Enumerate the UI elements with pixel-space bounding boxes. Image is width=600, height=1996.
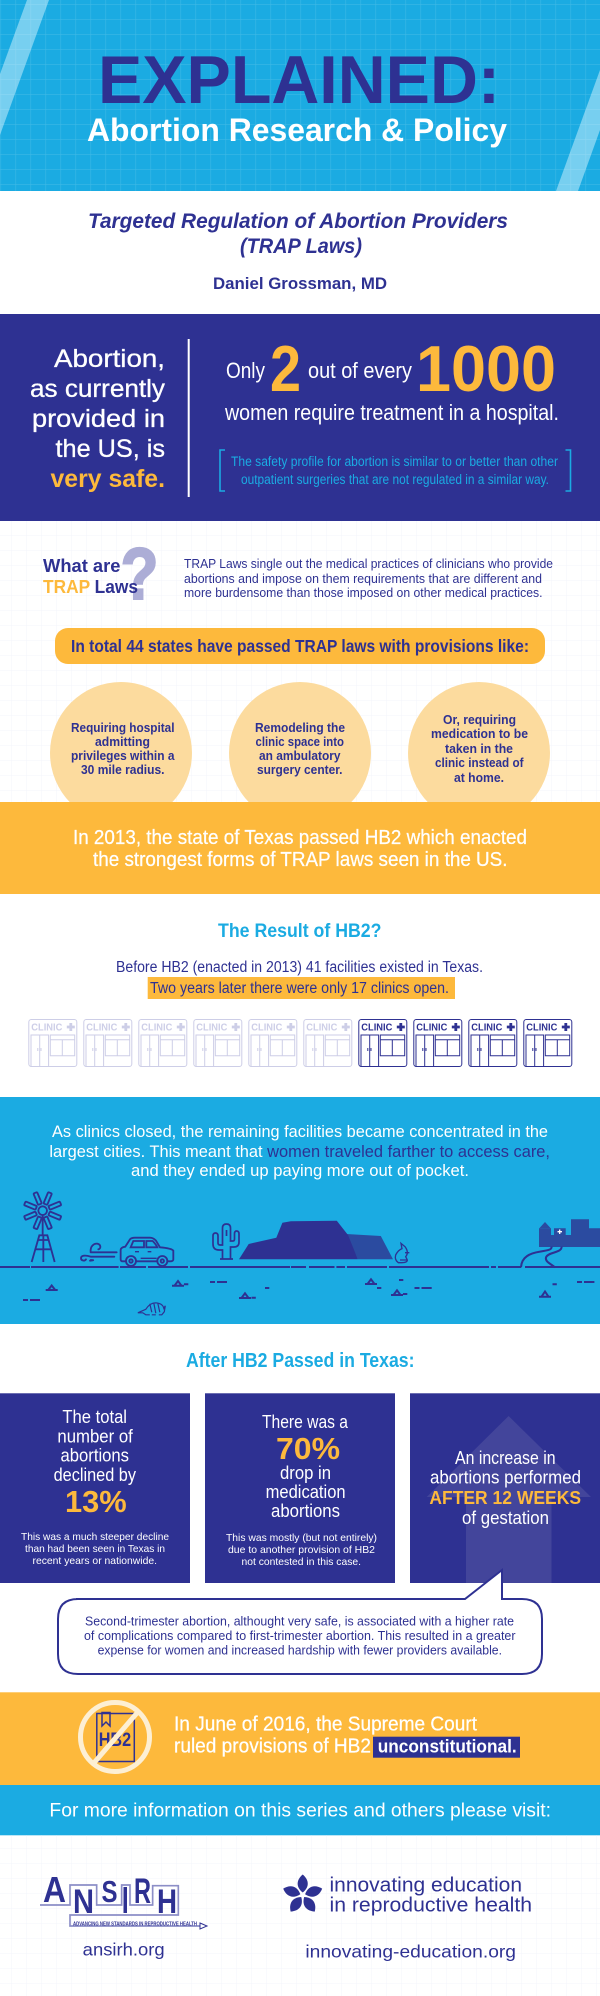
circle: remodeling: Remodeling the xyxy=(255,720,345,735)
icon: open clinic 3 xyxy=(469,1020,517,1067)
icon: open clinic 1: CLINIC xyxy=(361,1022,393,1034)
panel: 13 percent decline: The total xyxy=(62,1407,127,1427)
circle: remodeling: an ambulatory xyxy=(259,748,341,763)
banner: Texas HB2: the strongest forms of TRAP laws seen in the US. xyxy=(93,849,508,871)
logo text: innovating education: innovating education xyxy=(330,1875,522,1897)
panel: 13 percent decline: This was a much steeper decline xyxy=(21,1531,169,1543)
icon: flower logo xyxy=(282,1874,324,1915)
icon: closed clinic 6: CLINIC xyxy=(306,1022,338,1034)
panel: 70 percent drop xyxy=(205,1393,395,1583)
banner: supreme court: In June of 2016, the Supreme Court xyxy=(174,1714,477,1736)
statistic: 1000 xyxy=(416,332,556,405)
logo: ANSIRH xyxy=(40,1869,207,1929)
panel: travel scene xyxy=(0,1097,600,1324)
logo: ANSIRH: ADVANCING NEW STANDARDS IN REPRODUCTIVE HEALTH xyxy=(73,1922,197,1928)
icon: closed clinic 5 xyxy=(249,1020,297,1067)
text: clinics closed xyxy=(49,1122,550,1180)
panel: after 12 weeks: of gestation xyxy=(462,1508,549,1528)
what are TRAP laws xyxy=(43,534,553,615)
ground line xyxy=(0,1266,600,1268)
panel: 70 percent drop: drop in xyxy=(280,1463,331,1483)
icon: open clinic 2: CLINIC xyxy=(416,1022,448,1034)
panel: 13 percent decline xyxy=(0,1393,190,1583)
banner: Texas HB2 xyxy=(0,802,600,894)
panel: 70 percent drop: medication xyxy=(266,1482,346,1502)
heading: after HB2: After HB2 Passed in Texas: xyxy=(186,1350,414,1372)
highlighted text: 17 clinics: Two years later there were only 17 clinics open. xyxy=(150,980,449,997)
panel: 70 percent drop: There was a xyxy=(262,1412,349,1432)
bracketed note: outpatient surgeries that are not regulated in a similar way. xyxy=(241,472,549,487)
banner: 44 states: In total 44 states have passed TRAP laws with provisions like: xyxy=(71,636,529,656)
circle: remodeling xyxy=(229,682,371,824)
panel: 13 percent decline: than had been seen in Texas in xyxy=(25,1543,165,1555)
logo text: innovating education xyxy=(330,1875,532,1916)
callout: second trimester xyxy=(58,1570,542,1674)
panel: 13 percent decline: 13% xyxy=(65,1484,127,1519)
panel: 13 percent decline: abortions xyxy=(60,1446,129,1466)
panel: after 12 weeks: abortions performed xyxy=(430,1467,581,1487)
definition: TRAP Laws single out the medical practices of clinicians who provide xyxy=(184,556,553,571)
text: before HB2: Before HB2 (enacted in 2013) 41 facilities existed in Texas. xyxy=(116,959,483,976)
icon: closed clinic 3 xyxy=(139,1020,187,1067)
icon: banned HB2 book: HB2 xyxy=(99,1730,131,1751)
topic heading: (TRAP Laws) xyxy=(240,235,362,258)
circle: hospital privileges: 30 mile radius. xyxy=(81,762,164,777)
panel: 70 percent drop: 70% xyxy=(276,1431,340,1466)
circle: medication xyxy=(408,682,550,824)
panel: 70 percent drop: not contested in this case. xyxy=(242,1556,361,1568)
icon: closed clinic 4 xyxy=(194,1020,242,1067)
logo: ANSIRH: R xyxy=(134,1872,151,1911)
icon: windmill xyxy=(24,1192,61,1262)
banner: 44 states xyxy=(55,628,545,664)
icon: closed clinic 2 xyxy=(84,1020,132,1067)
statement: Abortion, xyxy=(54,345,165,373)
circle: remodeling: surgery center. xyxy=(257,762,342,777)
banner: supreme court: ruled provisions of HB2 xyxy=(174,1735,371,1757)
statement: the US, is xyxy=(56,435,165,463)
statement: very safe. xyxy=(50,465,165,493)
panel: 13 percent decline: declined by xyxy=(54,1465,136,1485)
link: ansirh: ansirh.org xyxy=(83,1940,165,1960)
footer grid background xyxy=(0,1835,600,1996)
icon: closed clinic 2: CLINIC xyxy=(86,1022,118,1034)
statistic: Only xyxy=(226,358,265,383)
statistic: women require treatment in a hospital. xyxy=(224,400,559,425)
icon: question mark: ? xyxy=(120,534,158,615)
panel: after 12 weeks xyxy=(410,1393,600,1583)
icon: wind xyxy=(81,1244,117,1261)
statistic: out of every xyxy=(308,358,412,383)
panel: 70 percent drop: This was mostly (but not entirely) xyxy=(226,1532,377,1544)
icon: closed clinic 4: CLINIC xyxy=(196,1022,228,1034)
panel: after 12 weeks: AFTER 12 WEEKS xyxy=(429,1487,581,1508)
icon: city with clinic xyxy=(539,1219,600,1247)
icon: up arrow xyxy=(427,1416,591,1583)
logo text: innovating education: in reproductive health xyxy=(330,1894,532,1916)
callout: second trimester: expense for women and increased hardship with fewer providers available. xyxy=(98,1643,502,1658)
statistic: 2 xyxy=(270,332,301,405)
circle: hospital privileges: privileges within a xyxy=(71,748,175,763)
icon: open clinic 1 xyxy=(359,1020,407,1067)
logo: ANSIRH: S xyxy=(102,1874,118,1909)
statistic xyxy=(224,332,559,425)
heading: TRAP Laws xyxy=(43,577,138,597)
author: Daniel Grossman, MD xyxy=(213,274,387,293)
icon: open clinic 4 xyxy=(524,1020,572,1067)
icon: open clinic 2 xyxy=(414,1020,462,1067)
panel: after 12 weeks: An increase in xyxy=(455,1448,556,1468)
circle: medication: taken in the xyxy=(445,741,513,756)
definition xyxy=(184,556,553,600)
topic heading: Targeted Regulation of Abortion Providers xyxy=(88,210,508,233)
icon: closed clinic 5: CLINIC xyxy=(251,1022,283,1034)
heading xyxy=(43,556,138,597)
text: clinics closed: and they ended up paying more out of pocket. xyxy=(131,1161,469,1180)
bracketed note: The safety profile for abortion is similar to or better than other xyxy=(231,454,558,469)
link: innovating education: innovating-education.org xyxy=(305,1942,516,1962)
subtitle: Abortion Research & Policy xyxy=(87,112,507,148)
panel: very safe xyxy=(0,314,600,521)
icon: mesa xyxy=(239,1221,393,1259)
circle: medication: clinic instead of xyxy=(435,755,524,770)
title: EXPLAINED: xyxy=(98,42,500,118)
icon: closed clinic 6 xyxy=(304,1020,352,1067)
panel: 70 percent drop: abortions xyxy=(271,1501,340,1521)
circle: medication: at home. xyxy=(454,770,504,785)
panel: 13 percent decline: number of xyxy=(57,1427,134,1447)
banner: more information xyxy=(0,1785,600,1835)
heading: What are xyxy=(43,556,120,576)
desert rocks xyxy=(23,1279,594,1300)
icon: closed clinic 1: CLINIC xyxy=(31,1022,63,1034)
icon: open clinic 3: CLINIC xyxy=(471,1022,503,1034)
definition: more burdensome than those imposed on other medical practices. xyxy=(184,585,542,600)
highlighted word: unconstitutional. xyxy=(378,1735,517,1756)
icon: winding road xyxy=(521,1247,562,1267)
definition: abortions and impose on them requirements that are different and xyxy=(184,571,542,586)
grid background xyxy=(0,521,600,802)
header banner xyxy=(0,0,600,191)
circle: hospital privileges: Requiring hospital xyxy=(71,720,174,735)
logo: ANSIRH: A xyxy=(43,1869,66,1910)
banner: more information: For more information on this series and others please visit: xyxy=(49,1800,551,1822)
heading: result of HB2: The Result of HB2? xyxy=(218,921,382,942)
icon: car xyxy=(121,1238,173,1266)
topic heading xyxy=(88,210,508,258)
icon: banned HB2 book xyxy=(80,1702,150,1772)
clinic icons row xyxy=(29,1020,572,1067)
logo: ANSIRH: H xyxy=(157,1883,177,1921)
text: clinics closed: As clinics closed, the remaining facilities became concentrated in the xyxy=(52,1122,548,1141)
banner: supreme court xyxy=(0,1692,600,1785)
callout: second trimester: of complications compared to first-trimester abortion. This resulted in a greater xyxy=(84,1628,516,1643)
callout: second trimester: Second-trimester abortion, althought very safe, is associated with a higher rate xyxy=(85,1614,514,1629)
circle: hospital privileges: admitting xyxy=(95,734,150,749)
statement: provided in xyxy=(32,405,165,433)
icon: closed clinic 1 xyxy=(29,1020,77,1067)
panel: 13 percent decline: recent years or nationwide. xyxy=(32,1555,157,1567)
circle: medication: medication to be xyxy=(431,726,528,741)
bracketed note xyxy=(220,450,570,491)
circle: remodeling: clinic space into xyxy=(256,734,344,749)
statement: as currently xyxy=(30,375,166,403)
icon: closed clinic 3: CLINIC xyxy=(141,1022,173,1034)
icon: armadillo xyxy=(138,1303,165,1315)
circle: medication: Or, requiring xyxy=(443,712,516,727)
circle: hospital privileges xyxy=(50,682,192,824)
icon: cactus xyxy=(213,1224,239,1259)
panel: 70 percent drop: due to another provision of HB2 xyxy=(228,1544,375,1556)
statement xyxy=(30,345,166,493)
text: clinics closed: largest cities. This meant that women traveled farther to access care, xyxy=(49,1142,550,1161)
icon: rabbit xyxy=(395,1243,409,1263)
logo: ANSIRH: N xyxy=(73,1883,94,1921)
banner: Texas HB2: In 2013, the state of Texas passed HB2 which enacted xyxy=(73,827,527,849)
icon: open clinic 4: CLINIC xyxy=(526,1022,558,1034)
